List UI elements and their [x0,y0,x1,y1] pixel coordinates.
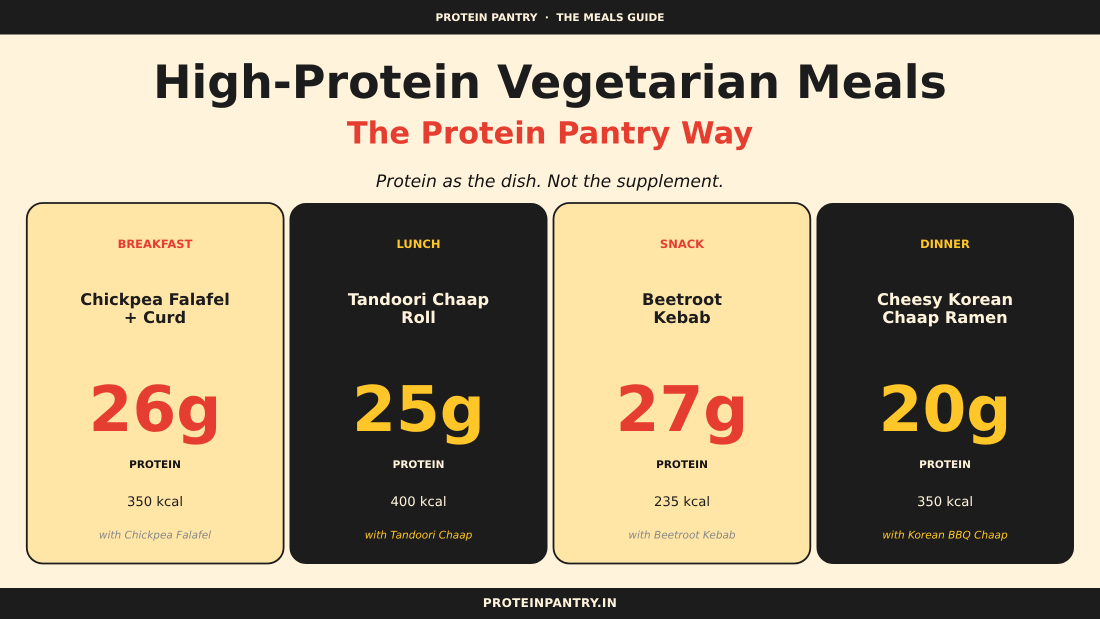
title: High-Protein Vegetarian Meals [153,55,947,109]
top banner: PROTEIN PANTRY · THE MEALS GUIDE [436,12,664,24]
panel: lunch card: 400 kcal [390,495,446,510]
panel: breakfast card: PROTEIN [129,459,181,471]
panel: dinner card: Cheesy Korean [877,290,1013,309]
footer banner: PROTEINPANTRY.IN [483,596,617,610]
panel: breakfast card: 26g [89,373,221,446]
panel: breakfast card: BREAKFAST [118,237,193,251]
panel: lunch card: Tandoori Chaap [348,290,489,309]
panel: snack card: Kebab [653,308,711,327]
subtitle: The Protein Pantry Way [347,116,753,152]
panel: snack card: Beetroot [642,290,722,309]
panel: dinner card: with Korean BBQ Chaap [882,530,1008,542]
panel: dinner card: 20g [879,373,1011,446]
panel: snack card: 27g [616,373,748,446]
footer banner [0,588,1100,619]
panel: breakfast card: + Curd [124,308,186,327]
panel: dinner card: 350 kcal [917,495,973,510]
panel: lunch card [290,204,547,564]
panel: lunch card: PROTEIN [393,459,444,471]
panel: snack card: 235 kcal [654,495,710,510]
panel: breakfast card: Chickpea Falafel [80,290,230,309]
panel: dinner card [817,204,1074,564]
panel: snack card: with Beetroot Kebab [628,530,736,542]
panel: breakfast card: with Chickpea Falafel [99,530,211,542]
tagline: Protein as the dish. Not the supplement. [376,172,724,192]
panel: lunch card: with Tandoori Chaap [365,530,473,542]
panel: lunch card: Roll [401,308,436,327]
panel: lunch card: LUNCH [397,237,440,251]
panel: snack card: SNACK [660,237,705,251]
panel: breakfast card [27,203,284,564]
panel: dinner card: PROTEIN [919,459,971,471]
panel: lunch card: 25g [352,373,485,446]
panel: breakfast card: 350 kcal [127,495,183,510]
top banner [0,0,1100,34]
panel: dinner card: Chaap Ramen [882,308,1008,327]
panel: snack card: PROTEIN [656,459,708,471]
panel: dinner card: DINNER [920,237,970,251]
panel: snack card [554,203,810,564]
